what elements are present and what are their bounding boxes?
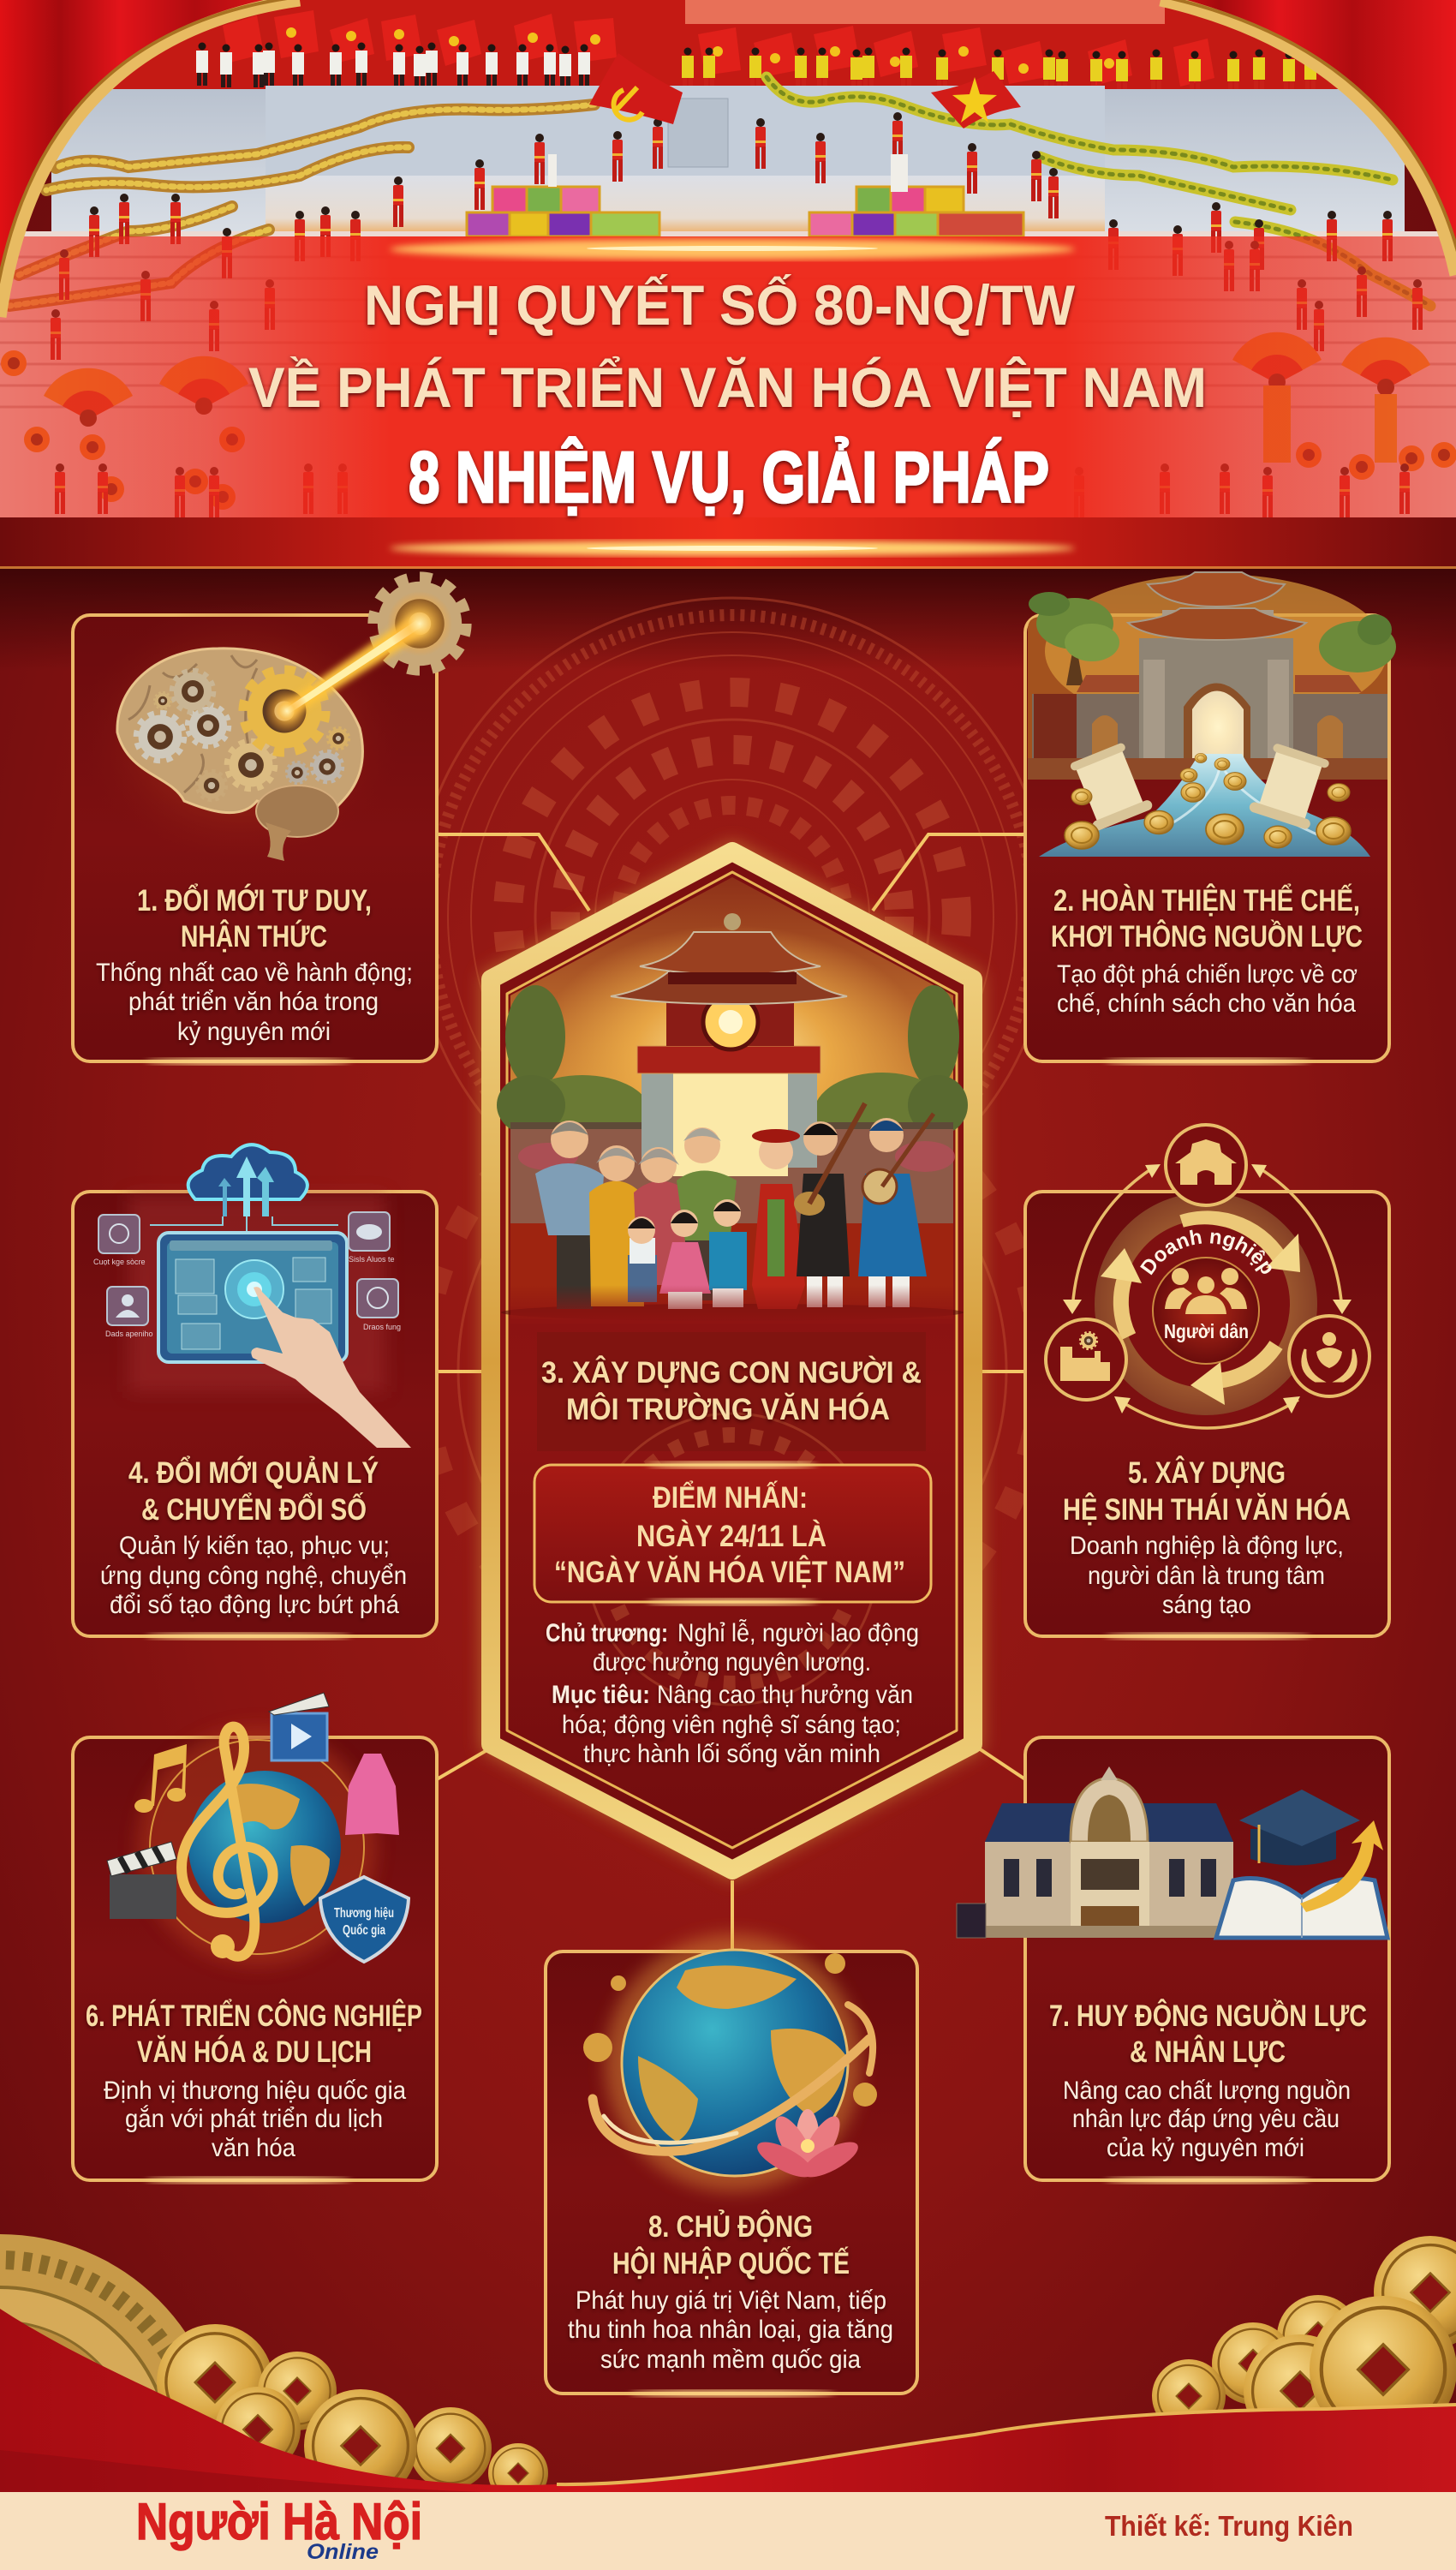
panel: central hexagon task 3 — [481, 841, 982, 1880]
icon: pink dress — [345, 1754, 399, 1835]
flag: Vietnam — [931, 71, 1021, 128]
heading: task 5: HỆ SINH THÁI VĂN HÓA — [1063, 1492, 1351, 1527]
heading: task 4: & CHUYỂN ĐỔI SỐ — [141, 1492, 367, 1527]
panel: task 1 — [73, 579, 464, 1065]
text: task 2: chế, chính sách cho văn hóa — [1057, 989, 1356, 1018]
illustration: temple and family — [497, 877, 968, 1324]
heading: task 3: 3. XÂY DỰNG CON NGƯỜI & — [541, 1355, 922, 1390]
opera house — [957, 1766, 1233, 1938]
text: policy and goal — [546, 1619, 919, 1768]
text: task 1: phát triển văn hóa trong — [128, 988, 379, 1016]
callout: highlight: ĐIỂM NHẤN: — [653, 1480, 808, 1515]
lower header band — [0, 239, 1456, 569]
icon: citadel node — [1166, 1125, 1246, 1205]
text: task 6: Định vị thương hiệu quốc gia — [104, 2077, 406, 2105]
title line 2: VỀ PHÁT TRIỂN VĂN HÓA VIỆT NAM — [248, 356, 1207, 419]
logo: Người Hà Nội — [136, 2493, 422, 2550]
text: policy and goal: Chủ trương: — [546, 1619, 668, 1647]
illustration: brain with gears — [77, 579, 464, 870]
dragons — [9, 77, 1430, 306]
title line 3: 8 NHIỆM VỤ, GIẢI PHÁP — [409, 437, 1049, 517]
text: task 6: văn hóa — [212, 2134, 295, 2162]
icon: treble clef — [182, 1727, 273, 1957]
text: task 5: người dân là trung tâm — [1088, 1562, 1325, 1590]
icon: lotus — [753, 2109, 862, 2184]
heading: task 2: 2. HOÀN THIỆN THỂ CHẾ, — [1053, 883, 1360, 917]
decoration: red ribbon — [0, 2309, 1456, 2495]
panel: task 6 — [73, 1693, 437, 2184]
heading: task 4: 4. ĐỔI MỚI QUẢN LÝ — [128, 1455, 379, 1490]
illustration: culture industry — [107, 1693, 409, 1966]
text: task 6 — [104, 2077, 406, 2162]
heading: task 6 — [86, 1999, 422, 2069]
temple — [673, 1073, 788, 1176]
open book — [1216, 1878, 1387, 1938]
bronze drum pattern — [414, 598, 1051, 1679]
text: task 1: kỷ nguyên mới — [177, 1018, 331, 1046]
text: policy and goal: thực hành lối sống văn minh — [583, 1740, 880, 1768]
decoration: bronze drum and coins — [0, 2234, 1456, 2570]
illustration: digital tablet: Sisls Aluos te — [349, 1255, 395, 1264]
heading: task 6: 6. PHÁT TRIỂN CÔNG NGHIỆP — [86, 1999, 422, 2033]
label: Doanh nghiệp: Doanh nghiệp — [1140, 1230, 1272, 1275]
growth arrow — [1300, 1820, 1383, 1912]
illustration: theatre, book and cap — [957, 1766, 1387, 1938]
icon: video clapper — [269, 1693, 329, 1760]
callout: highlight: “NGÀY VĂN HÓA VIỆT NAM” — [554, 1555, 905, 1589]
text: task 7 — [1063, 2077, 1351, 2162]
heading: task 7 — [1049, 1999, 1367, 2069]
bronze drum — [0, 2234, 224, 2570]
text: task 8 — [568, 2286, 893, 2374]
stage and crowd — [0, 0, 1456, 569]
designer credit: Thiết kế: Trung Kiên — [1105, 2510, 1353, 2542]
title line 1: NGHỊ QUYẾT SỐ 80-NQ/TW — [364, 273, 1076, 337]
globe — [622, 1950, 848, 2176]
panel: task 7 — [957, 1737, 1389, 2184]
heading patch with drum pattern — [537, 1332, 926, 1705]
outer arrows — [1072, 1167, 1342, 1428]
icon: people — [1165, 1268, 1247, 1314]
icon: brand shield: Thương hiệu — [334, 1906, 394, 1921]
panel: task 8 — [546, 1934, 917, 2397]
text: task 2 — [1057, 960, 1358, 1018]
icon: business node — [1046, 1319, 1126, 1400]
title — [248, 273, 1207, 517]
colored banner stacks — [467, 187, 1023, 236]
ring and arrows — [1095, 1192, 1317, 1415]
hand — [251, 1287, 411, 1448]
text: task 8: Phát huy giá trị Việt Nam, tiếp — [576, 2286, 886, 2315]
text: policy and goal: Nghỉ lễ, người lao động — [677, 1619, 919, 1647]
text: task 5: Doanh nghiệp là động lực, — [1070, 1532, 1344, 1560]
family group — [501, 1103, 964, 1321]
text: task 4: đổi số tạo động lực bứt phá — [110, 1591, 399, 1619]
label: Người dân: Người dân — [1164, 1320, 1249, 1342]
floating icons — [98, 1212, 398, 1325]
heading: task 8: HỘI NHẬP QUỐC TẾ — [612, 2246, 850, 2280]
icon: brand shield — [320, 1877, 409, 1962]
footer — [0, 2492, 1456, 2570]
text: task 2: Tạo đột phá chiến lược về cơ — [1057, 960, 1358, 989]
text: policy and goal: Mục tiêu: — [552, 1681, 650, 1709]
text: task 5: sáng tạo — [1162, 1591, 1251, 1619]
performers on stage — [474, 159, 485, 210]
heading: task 5 — [1063, 1455, 1351, 1527]
icon: care node — [1289, 1316, 1369, 1396]
illustration: gate, river and coins — [1028, 572, 1396, 874]
text: task 4: Quản lý kiến tạo, phục vụ; — [119, 1532, 390, 1560]
icon: music note — [134, 1744, 187, 1813]
fans and flowers — [1, 332, 1456, 517]
text: task 5 — [1070, 1532, 1344, 1619]
heading: task 7: & NHÂN LỰC — [1130, 2035, 1286, 2069]
illustration: digital tablet: Dads apeniho — [105, 1330, 153, 1338]
heading: task 7: 7. HUY ĐỘNG NGUỒN LỰC — [1049, 1999, 1367, 2033]
heading: task 3 — [541, 1355, 922, 1426]
text: task 8: sức mạnh mềm quốc gia — [600, 2346, 861, 2374]
panel: task 4 — [73, 1145, 437, 1640]
text: task 7: của kỷ nguyên mới — [1107, 2134, 1304, 2162]
heading: task 1: 1. ĐỔI MỚI TƯ DUY, — [137, 883, 372, 917]
heading: task 2: KHƠI THÔNG NGUỒN LỰC — [1051, 919, 1363, 953]
callout: highlight: NGÀY 24/11 LÀ — [636, 1519, 826, 1553]
text: task 1: Thống nhất cao về hành động; — [96, 959, 413, 987]
connectors — [437, 834, 1025, 1950]
illustration: globe and lotus — [583, 1934, 877, 2191]
heading: task 1 — [137, 883, 372, 953]
flag: party — [589, 53, 683, 124]
callout: highlight — [534, 1461, 931, 1605]
illustration: ecosystem cycle — [1044, 1123, 1371, 1430]
heading: task 4 — [128, 1455, 379, 1527]
text: task 6: gắn với phát triển du lịch — [125, 2105, 383, 2133]
trees — [497, 985, 968, 1155]
text: policy and goal: Nâng cao thụ hưởng văn — [657, 1681, 913, 1709]
ornaments — [583, 1953, 877, 2107]
text: policy and goal: được hưởng nguyên lương. — [593, 1648, 871, 1676]
panel: task 5 — [1023, 1123, 1391, 1641]
text: task 4 — [100, 1532, 407, 1619]
globe — [188, 1771, 341, 1923]
icon: clapperboard — [107, 1842, 176, 1919]
heading: task 8: 8. CHỦ ĐỘNG — [648, 2209, 813, 2244]
heading: task 2 — [1051, 883, 1363, 953]
illustration: digital tablet: Draos fung — [363, 1323, 401, 1331]
graduation cap — [1239, 1790, 1360, 1866]
text: task 8: thu tinh hoa nhân loại, gia tăng — [568, 2316, 893, 2344]
panel: task 2 — [1025, 572, 1396, 1065]
illustration: digital tablet — [93, 1145, 411, 1448]
text: task 7: Nâng cao chất lượng nguồn — [1063, 2077, 1351, 2105]
text: task 7: nhân lực đáp ứng yêu cầu — [1072, 2105, 1340, 2133]
orbits — [593, 2005, 873, 2151]
cloud — [150, 1145, 338, 1234]
heading: task 8 — [612, 2209, 850, 2280]
text: policy and goal: hóa; động viên nghệ sĩ sáng tạo; — [562, 1711, 901, 1739]
logo: Online — [307, 2540, 379, 2564]
text: task 1 — [96, 959, 413, 1046]
heading: task 1: NHẬN THỨC — [181, 919, 327, 953]
icon: brand shield: Quốc gia — [343, 1923, 385, 1938]
text: task 4: ứng dụng công nghệ, chuyển — [100, 1562, 407, 1590]
heading: task 3: MÔI TRƯỜNG VĂN HÓA — [566, 1392, 890, 1426]
red title overlay — [0, 236, 1456, 517]
heading: task 6: VĂN HÓA & DU LỊCH — [137, 2035, 372, 2069]
illustration: digital tablet: Cuọt kge sòcre — [93, 1258, 146, 1266]
heading: task 5: 5. XÂY DỰNG — [1128, 1455, 1286, 1490]
curtains — [0, 0, 1456, 317]
